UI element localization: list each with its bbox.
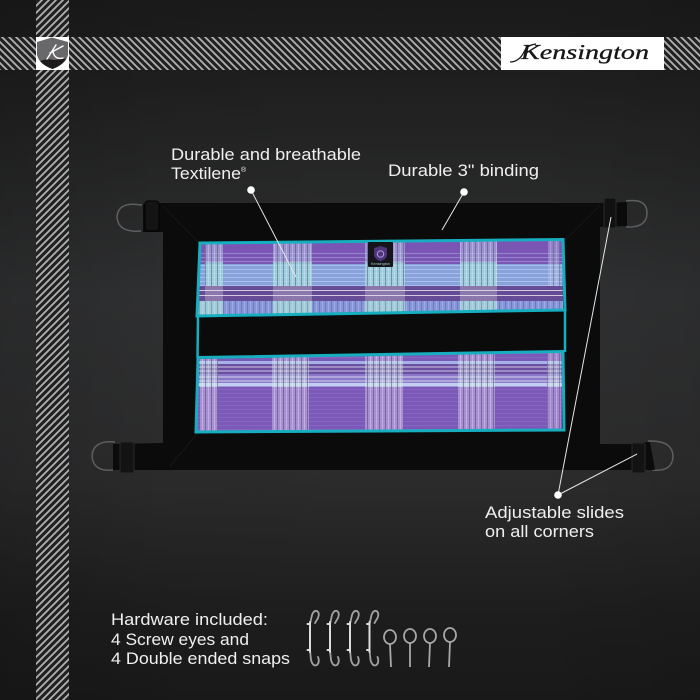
top plaid panel (195, 238, 567, 318)
icon: black brand label (368, 242, 393, 267)
icon: top right D-ring and slide (604, 198, 647, 228)
Kensington logo plate: Kensington (520, 40, 649, 64)
icon: four double ended snaps (308, 611, 378, 665)
callout: Textilene (171, 146, 361, 277)
icon: bottom right D-ring and slide (632, 441, 673, 473)
callout: binding (388, 162, 539, 230)
callout: Textilene: Durable and breathable (171, 146, 361, 164)
hatched horizontal band (0, 37, 700, 70)
callout: Textilene: Textilene (171, 165, 241, 183)
text: hardware included: 4 Screw eyes and (111, 631, 249, 649)
callout: adjustable slides: on all corners (485, 523, 594, 541)
text: hardware included (111, 611, 290, 668)
hatched vertical band (36, 0, 69, 700)
icon: bottom left D-ring and slide (92, 442, 134, 473)
callout: adjustable slides: Adjustable slides (485, 504, 624, 522)
bottom plaid panel (195, 350, 567, 434)
icon: K shield logo (36, 37, 69, 70)
callout: adjustable slides (485, 217, 637, 541)
Kensington logo plate (501, 37, 664, 70)
text: hardware included: Hardware included: (111, 611, 268, 629)
text: hardware included: 4 Double ended snaps (111, 650, 290, 668)
callout: binding: Durable 3" binding (388, 162, 539, 180)
middle strap teal edges (198, 310, 565, 358)
icon: four screw eyes (384, 628, 456, 667)
callout: Textilene: ® (241, 166, 247, 174)
black binding body and straps (113, 202, 640, 470)
icon: black brand label: Kensington (371, 261, 390, 266)
stall guard product (92, 198, 673, 473)
icon: top left D-ring and slide (117, 201, 159, 231)
